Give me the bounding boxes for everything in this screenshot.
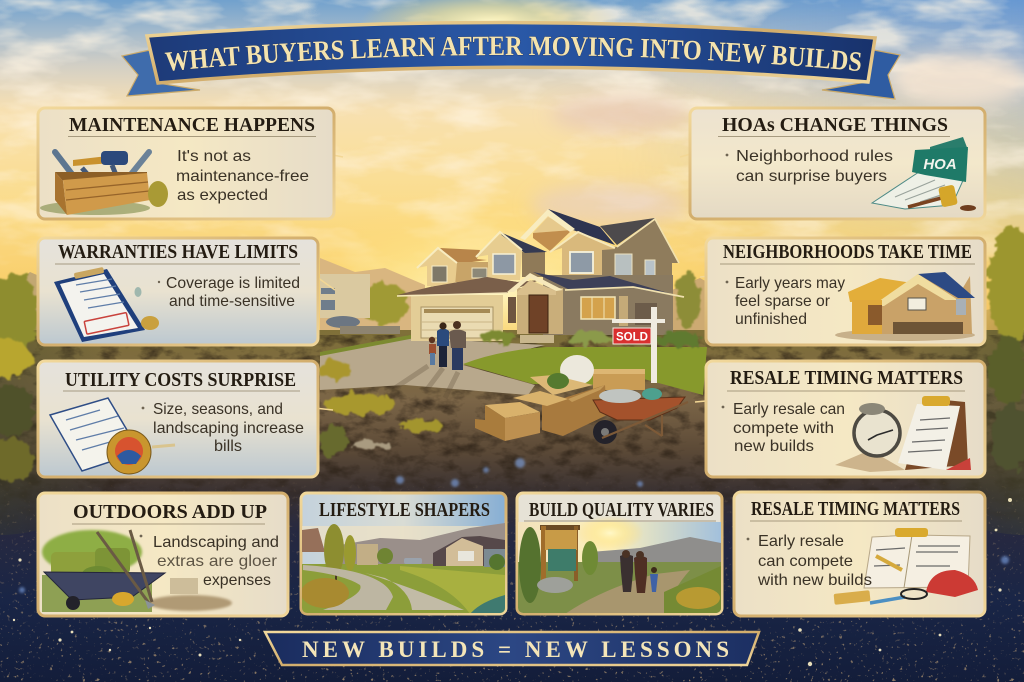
body text: Landscaping and xyxy=(153,534,279,551)
body text: unfinished xyxy=(735,311,807,328)
body text: feel sparse or xyxy=(735,293,831,310)
front door xyxy=(529,295,548,333)
right ribbon tail xyxy=(822,50,900,99)
heading: LIFESTYLE SHAPERS xyxy=(319,499,490,521)
icon: HOA document and gavel: HOA xyxy=(923,156,957,173)
body text: expenses xyxy=(203,572,271,589)
background: ground fading into starry night xyxy=(0,305,1024,682)
body text: Neighborhood rules xyxy=(736,148,893,165)
body text xyxy=(757,533,872,589)
gold connector streaks xyxy=(305,150,717,410)
heading: RESALE TIMING MATTERS xyxy=(730,367,963,389)
background: sunset sky xyxy=(0,0,1024,330)
panel: outdoors add up xyxy=(38,493,288,616)
garage door xyxy=(421,307,493,338)
left ribbon tail xyxy=(122,50,200,96)
body text xyxy=(733,401,845,455)
body text: Early years may xyxy=(735,275,845,292)
heading: MAINTENANCE HAPPENS xyxy=(69,114,315,136)
scene: family at development sign xyxy=(518,515,721,614)
scene: neighborhood street xyxy=(300,523,505,614)
panel: maintenance happens xyxy=(38,108,334,219)
panel: HOAs change things xyxy=(690,108,985,219)
body text: Early resale xyxy=(758,533,844,550)
body text: with new builds xyxy=(757,572,872,589)
heading: HOAs CHANGE THINGS xyxy=(722,114,948,136)
house with driveway and garage xyxy=(397,209,702,347)
panel: utility costs surprise xyxy=(38,361,318,477)
body text xyxy=(153,401,304,455)
panel: build quality varies xyxy=(517,493,722,614)
body text xyxy=(736,148,893,185)
panel: lifestyle shapers xyxy=(300,493,506,614)
body text: as expected xyxy=(177,187,268,204)
heading: WARRANTIES HAVE LIMITS xyxy=(58,241,298,263)
icon: unfinished house xyxy=(835,272,975,341)
body text: maintenance-free xyxy=(176,168,309,185)
yard: lawn, driveway and bushes xyxy=(320,272,707,456)
body text: bills xyxy=(214,438,242,455)
icon: notebook, hard hat and tools xyxy=(834,528,978,605)
icon: utility bill and coin xyxy=(50,398,175,474)
body text: can compete xyxy=(758,553,853,570)
wheelbarrow in yard xyxy=(593,388,688,444)
body text: and time-sensitive xyxy=(169,293,295,310)
trees: left edge xyxy=(0,272,38,482)
heading: BUILD QUALITY VARIES xyxy=(529,499,714,521)
title banner xyxy=(121,20,901,100)
body text xyxy=(176,148,309,204)
moving boxes xyxy=(475,355,645,441)
banner body xyxy=(147,22,875,83)
body text: Coverage is limited xyxy=(166,275,300,292)
body text: Early resale can xyxy=(733,401,845,418)
SOLD sign: SOLD xyxy=(616,332,648,344)
trees: right edge xyxy=(988,227,1024,472)
body text: compete with xyxy=(733,420,834,437)
heading: OUTDOORS ADD UP xyxy=(73,501,267,523)
body text: new builds xyxy=(734,438,814,455)
icon: wheelbarrow with sod and tools xyxy=(42,530,232,612)
body text: It's not as xyxy=(177,148,251,165)
body text xyxy=(153,534,279,589)
banner title: WHAT BUYERS LEARN AFTER MOVING INTO NEW BUILDS xyxy=(164,36,861,72)
body text xyxy=(166,275,300,310)
icon: toolbox xyxy=(40,151,168,215)
background: distant hills xyxy=(0,258,730,340)
icon: HOA document and gavel xyxy=(872,137,976,211)
panel: warranties have limits xyxy=(38,238,318,345)
heading: NEIGHBORHOODS TAKE TIME xyxy=(723,241,972,263)
icon: alarm clock and checklist xyxy=(835,396,971,472)
body text: landscaping increase xyxy=(153,420,304,437)
panel: resale timing matters (bottom) xyxy=(734,492,985,616)
body text: extras are gloer xyxy=(157,553,278,570)
body text xyxy=(735,275,845,328)
footer banner xyxy=(265,632,759,665)
body text: Size, seasons, and xyxy=(153,401,283,418)
footer slogan: NEW BUILDS = NEW LESSONS xyxy=(302,637,729,662)
icon: clipboard with warranty form xyxy=(54,267,159,342)
panel: resale timing matters (upper) xyxy=(706,361,985,477)
family walking up the driveway xyxy=(395,321,466,398)
heading: RESALE TIMING MATTERS xyxy=(751,498,960,520)
heading: UTILITY COSTS SURPRISE xyxy=(65,369,296,391)
panel: neighborhoods take time xyxy=(706,238,985,345)
body text: can surprise buyers xyxy=(736,168,887,185)
SOLD sign xyxy=(612,307,665,383)
